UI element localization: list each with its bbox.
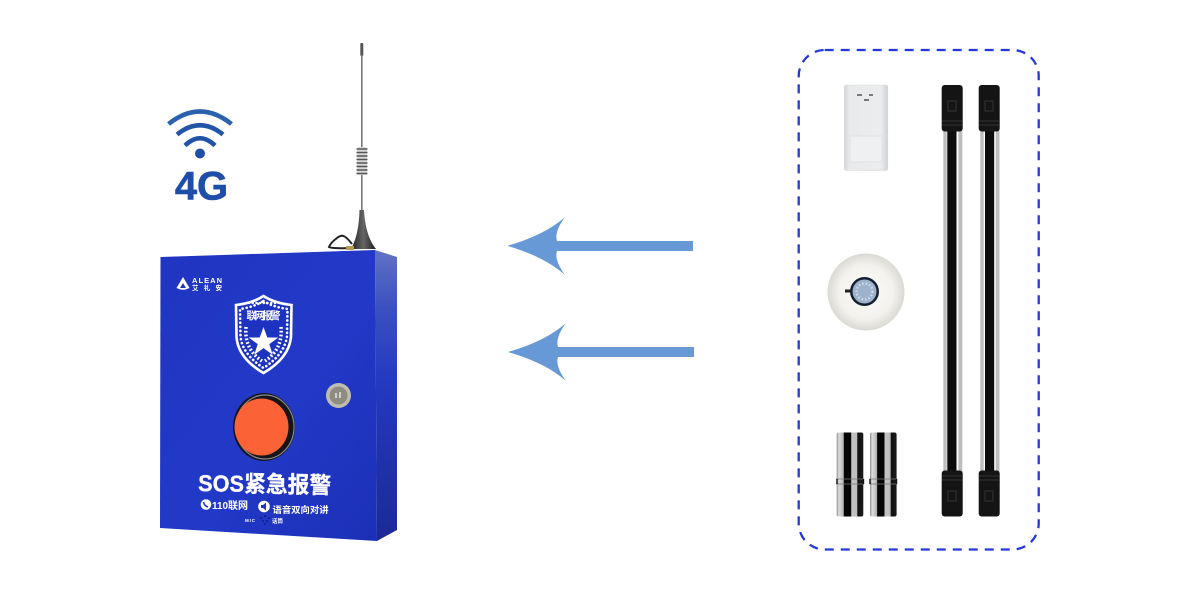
panel: accessory sensors dashed frame (799, 50, 1039, 550)
mic and speaker label: 话筒 (272, 517, 283, 525)
icon: right infrared barrier bar (979, 85, 1000, 516)
arrow 2 (508, 323, 694, 381)
alarm box (160, 250, 397, 541)
feature: two-way voice (258, 501, 328, 515)
icon: PIR motion sensor (844, 85, 888, 170)
arrow 1 (508, 217, 693, 275)
icon: wifi signal (168, 112, 232, 158)
police shield emblem: 联网报警 (246, 309, 281, 322)
feature: 110 networking: 110联网 (212, 499, 248, 512)
label: 4G: 4G (175, 164, 228, 208)
mic and speaker label (245, 515, 283, 525)
mic and speaker label: MIC (245, 518, 256, 523)
antenna (329, 43, 376, 250)
feature: 110 networking (201, 499, 248, 512)
icon: left infrared barrier bar (942, 85, 963, 516)
police shield emblem (236, 296, 292, 373)
product title: SOS紧急报警 (198, 470, 331, 498)
red push button (233, 393, 295, 461)
logo: ALEAN (192, 276, 222, 285)
key switch (326, 383, 351, 408)
logo: 艾礼安 (192, 283, 222, 292)
logo (176, 276, 222, 292)
icon: active infrared beam pair (836, 432, 897, 516)
feature: two-way voice: 语音双向对讲 (272, 504, 328, 515)
icon: ceiling dome detector (828, 254, 904, 330)
